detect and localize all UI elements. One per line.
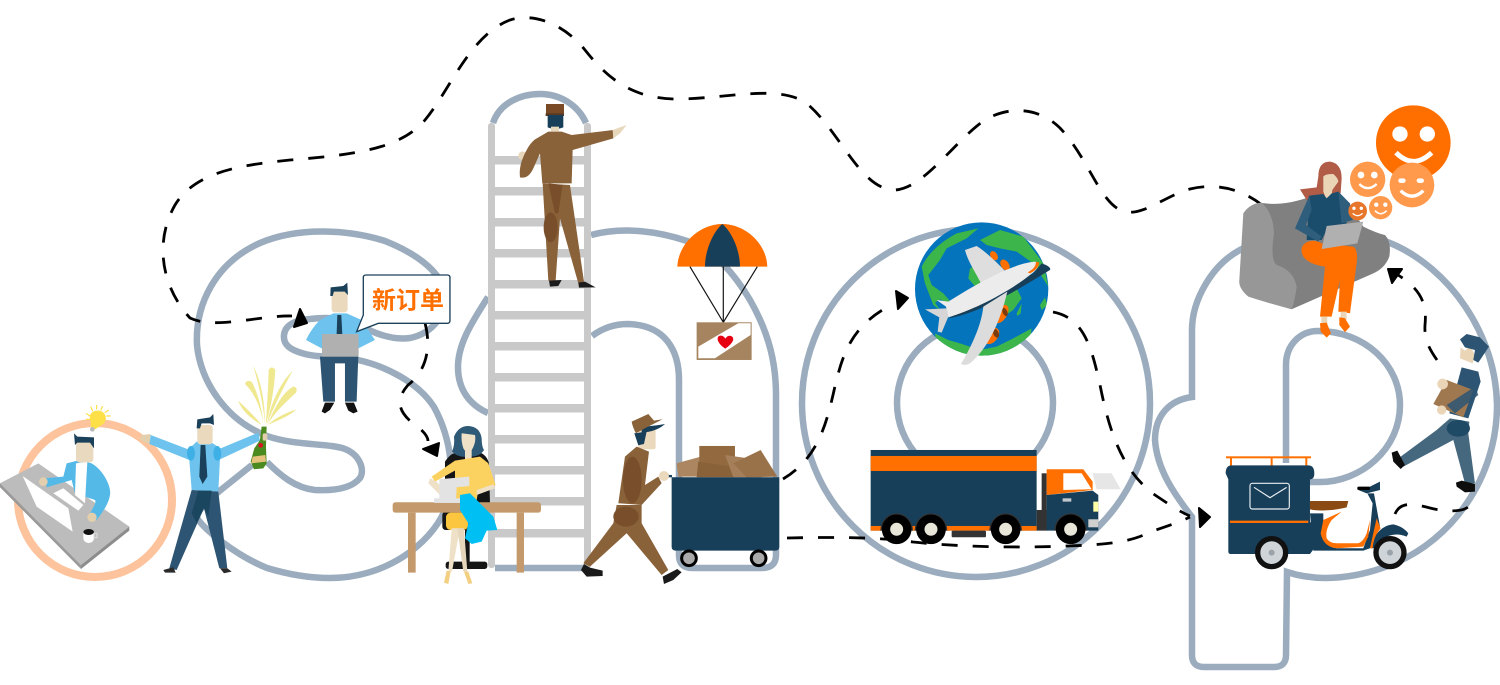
hat and face	[546, 104, 564, 131]
hand left	[518, 151, 527, 160]
dashed route: truck to scooter	[787, 517, 1190, 547]
roof rail	[1226, 456, 1311, 466]
figure: globe with plane	[915, 222, 1050, 365]
wheels	[886, 519, 1081, 540]
boots	[549, 280, 596, 288]
trousers	[1398, 418, 1475, 483]
speech bubble	[357, 275, 450, 332]
head and cap	[632, 414, 665, 449]
wheel arches	[880, 513, 1087, 531]
trousers	[163, 490, 232, 573]
shirt	[306, 313, 375, 348]
arrowheads	[294, 269, 1402, 527]
cargo box	[1226, 465, 1317, 554]
uniform top	[520, 130, 613, 183]
letter h outline	[458, 94, 776, 568]
trousers	[320, 357, 358, 413]
sewing machine	[434, 477, 469, 503]
smile: large	[1376, 105, 1451, 180]
dashed route: globe to scooter	[1053, 312, 1190, 516]
plane wings and fuselage	[925, 246, 1050, 365]
orange trousers	[1302, 241, 1357, 317]
canopy	[677, 224, 767, 267]
figure: delivery truck	[871, 450, 1121, 540]
office chair	[442, 453, 490, 569]
hair and head	[452, 426, 484, 461]
speech bubble: 新订单	[372, 288, 444, 315]
customer face	[1323, 174, 1338, 198]
boots	[1392, 451, 1475, 492]
table	[393, 502, 541, 573]
torso and arms	[149, 433, 260, 492]
hand on cart	[659, 471, 669, 481]
figure: parachute with parcel	[677, 224, 767, 360]
hand right	[613, 125, 627, 138]
champagne bottle	[251, 427, 267, 469]
figure: office worker at desk	[0, 405, 129, 569]
ankles and shoes	[1320, 312, 1350, 338]
figure: seamstress at table	[393, 426, 541, 584]
tie	[199, 445, 207, 484]
armchair	[1239, 195, 1390, 309]
globe	[915, 222, 1048, 357]
cab	[1047, 469, 1121, 531]
yellow top and arms	[428, 457, 496, 500]
skirt and legs	[444, 513, 472, 584]
scooter body	[1310, 482, 1408, 551]
plane engines	[981, 250, 1012, 347]
figure: customer on armchair	[1239, 105, 1451, 338]
cart body and wheels	[665, 474, 779, 566]
laptop	[1322, 222, 1363, 249]
laptop	[23, 476, 83, 532]
hair	[1300, 162, 1342, 200]
chassis	[952, 473, 1047, 537]
worker body	[39, 433, 110, 522]
smile: medium left	[1350, 162, 1385, 197]
laptop	[322, 334, 359, 357]
head	[140, 414, 214, 444]
smile: medium right	[1390, 163, 1434, 207]
blue fabric	[460, 493, 497, 544]
champagne spray	[238, 366, 297, 425]
dashed route: top long arc to new order	[163, 18, 1262, 323]
cart boxes	[677, 446, 777, 477]
desk	[0, 463, 129, 569]
cargo box	[871, 450, 1037, 531]
uniform and trousers	[583, 447, 668, 575]
dashed route: cart to globe	[783, 303, 895, 479]
strings	[690, 267, 757, 322]
trousers	[543, 183, 584, 283]
figure: man pushing cart	[581, 414, 779, 584]
boots	[581, 564, 682, 584]
ladder	[488, 123, 591, 568]
figure: man on ladder pointing	[518, 104, 627, 288]
jacket	[1449, 367, 1481, 418]
scooter wheels	[1258, 539, 1404, 567]
figure: delivery scooter	[1226, 456, 1408, 567]
letter p outline	[1155, 230, 1497, 667]
smile: small	[1369, 196, 1392, 219]
letter s outline	[197, 231, 451, 578]
peach circle behind office worker	[18, 423, 172, 577]
figure: man sitting with laptop and speech bubble	[306, 275, 450, 413]
figure: man with champagne	[140, 366, 297, 573]
parcel and hands	[1433, 379, 1478, 417]
figure: courier with parcel	[1392, 334, 1489, 492]
smile: tiny	[1348, 202, 1367, 220]
head	[330, 283, 348, 312]
letter o outline	[802, 229, 1150, 577]
coffee cup	[83, 529, 97, 543]
light bulb	[86, 405, 111, 432]
dashed route: bubble to seamstress	[400, 323, 428, 441]
dashed route: scooter to customer	[1395, 275, 1468, 514]
customer top and arms	[1295, 192, 1353, 242]
cap and head	[1460, 334, 1489, 363]
parcel with heart	[697, 322, 752, 360]
